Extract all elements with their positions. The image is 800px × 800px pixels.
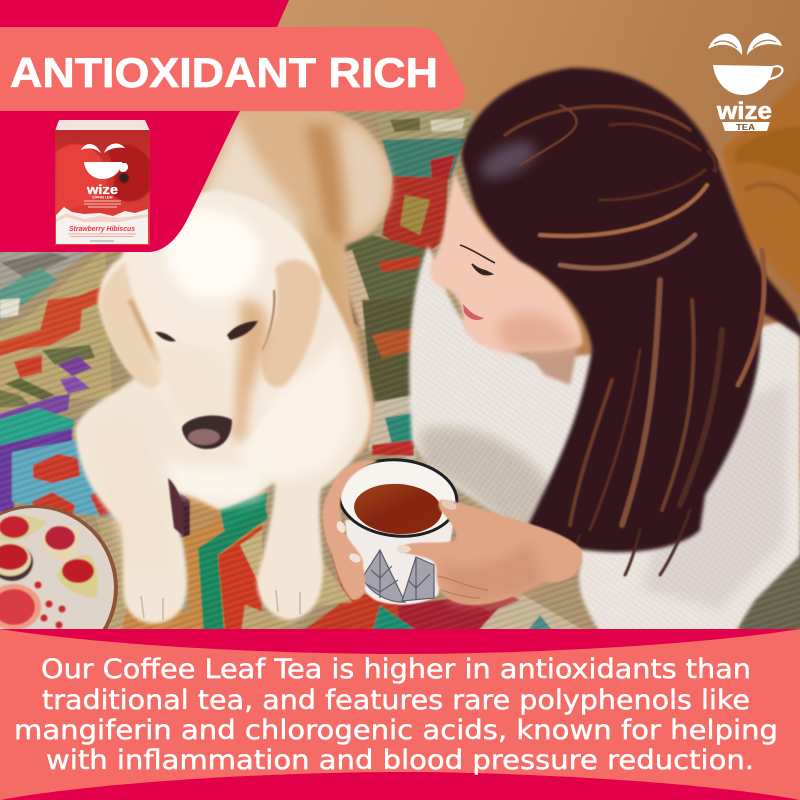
golden retriever [75, 110, 392, 624]
between the paws [118, 490, 262, 640]
orange band with red zigzag [0, 250, 112, 460]
orange trousers [722, 40, 800, 330]
logo: tea ribbon [722, 122, 770, 131]
neck shadow [520, 335, 580, 385]
dog body and front legs [75, 280, 370, 624]
tree pattern [362, 550, 434, 602]
face [430, 172, 582, 352]
fruit plate [0, 505, 118, 671]
left hand [323, 460, 378, 600]
mug body [345, 515, 455, 605]
paw toes [141, 590, 300, 620]
bottom crimson curve [0, 772, 800, 800]
woman [323, 68, 800, 632]
hair [462, 68, 800, 552]
small print bars [68, 234, 136, 236]
mini brand text: wize [86, 183, 118, 197]
wooden floor [0, 0, 800, 640]
logo: tea label: TEA [736, 122, 755, 132]
logo: wize: wize [716, 98, 772, 125]
box front [55, 130, 150, 245]
description text: mangiferin and chlorogenic acids, known for helping [14, 715, 778, 746]
under the mug [290, 510, 470, 640]
rim [336, 455, 460, 541]
dog head and ears [98, 190, 321, 449]
rug weave [0, 110, 800, 630]
logo: eyebrows [708, 34, 742, 55]
product box: Strawberry Hibiscus [55, 120, 150, 245]
description text: traditional tea, and features rare polyphenols like [42, 685, 750, 716]
dog eyes [155, 321, 258, 341]
ponytail band [708, 150, 716, 172]
strawberry [56, 144, 107, 210]
logo: smiling cup [713, 65, 773, 95]
top crimson curve [0, 629, 800, 654]
fig slices [0, 515, 98, 630]
description text: Our Coffee Leaf Tea is higher in antioxidants than [41, 654, 751, 685]
purple chevrons [58, 356, 92, 376]
plate [0, 505, 118, 671]
WIZE TEA logo [708, 33, 782, 132]
bottom salmon panel [0, 629, 800, 800]
tea mug [336, 455, 460, 605]
description text [14, 654, 778, 776]
knit sweater [409, 245, 800, 632]
white lower panel [56, 207, 148, 244]
dog nose [182, 416, 232, 449]
title banner [0, 27, 465, 111]
blue panel with red flowers [12, 440, 125, 518]
tagline bars [84, 201, 121, 207]
right hand [397, 499, 582, 605]
description text: with inflammation and blood pressure reduction. [46, 745, 754, 776]
title: ANTIOXIDANT RICH [10, 49, 438, 96]
top-left grey stripes [0, 245, 100, 325]
product box: Strawberry Hibiscus: COFFEE LEAF [92, 194, 113, 200]
mini logo [81, 144, 128, 179]
eye and brow [460, 245, 495, 275]
smile [463, 304, 484, 320]
hibiscus flower [108, 144, 150, 202]
box top [55, 120, 150, 131]
dog back and tail [190, 110, 392, 455]
top-left crimson panel [0, 0, 289, 252]
right-hand rug panel [375, 110, 475, 150]
flavour name: Strawberry Hibiscus [69, 224, 135, 233]
tea [352, 481, 444, 537]
patterned rug [0, 110, 800, 650]
